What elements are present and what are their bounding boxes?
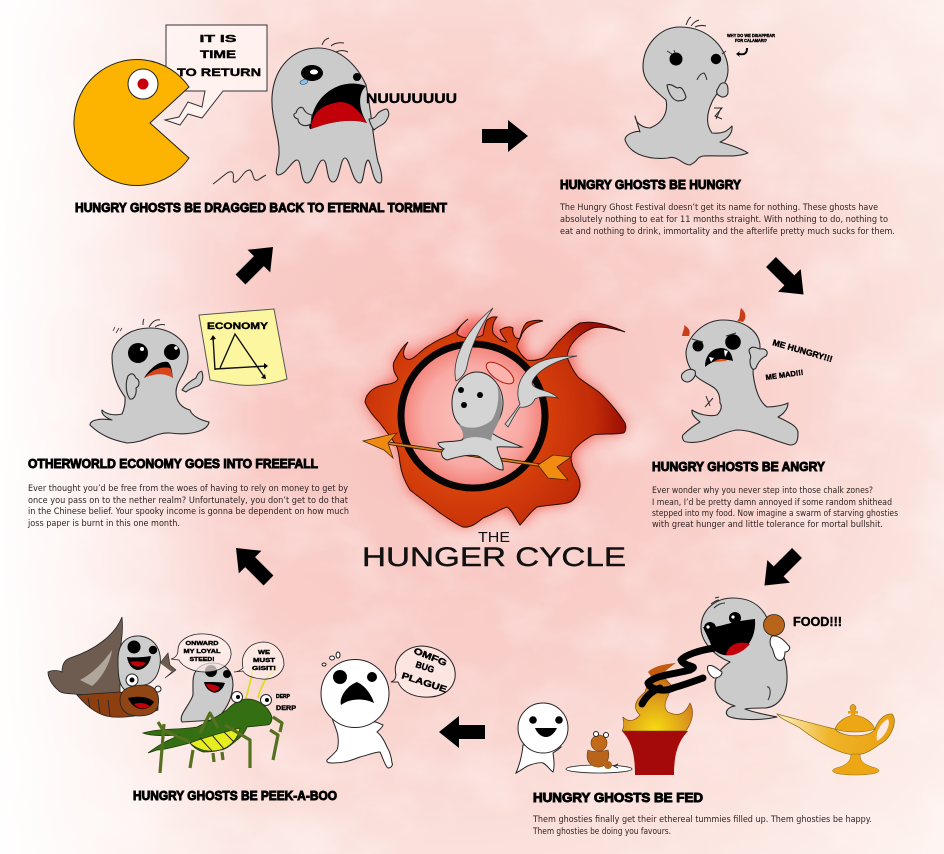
arrow head (363, 433, 397, 458)
speech bubble: it is time to return (165, 25, 267, 125)
text block: Them ghosties finally get their ethereal tummies filled up. Them ghosties be happy. (532, 815, 872, 825)
panel: hungry ghosts be angry (652, 308, 898, 530)
feasting ghost (701, 597, 790, 720)
icon: giant grasshopper (143, 666, 282, 773)
text block (652, 486, 898, 530)
halo (483, 358, 517, 388)
text block: once you pass on to the nether realm? Unfortunately, you don’t get to do that (28, 496, 349, 506)
text block: Ever wonder why you never step into those chalk zones? (652, 486, 873, 496)
arrow: to economy (225, 537, 280, 592)
derp text: DERP (276, 705, 297, 712)
ring (401, 344, 545, 488)
panel: dragged back to torment (74, 25, 457, 215)
arrow: to hungry (482, 120, 528, 152)
arrow: back to dragged (229, 236, 284, 291)
text block (27, 484, 349, 529)
icon: brazier with flame (622, 663, 693, 775)
text block: joss paper is burnt in this one month. (27, 519, 180, 529)
ghost screaming (272, 38, 389, 183)
text block: stepped into my food. Now imagine a swarm of starving ghosties (652, 509, 898, 519)
text block (559, 203, 895, 237)
text block: Ever thought you’d be free from the woes of having to rely on money to get by (28, 484, 348, 494)
icon: yellow pac-man (74, 60, 189, 186)
speech bubble: onward my loyal steed: MY LOYAL (184, 649, 221, 655)
ghost's thought text (727, 33, 776, 57)
angel wings (455, 308, 577, 427)
panel: otherworld economy goes into freefall (27, 309, 349, 529)
arrow: to fed (753, 542, 808, 597)
title: THE (478, 529, 510, 546)
text block: Them ghosties be doing you favours. (532, 827, 671, 837)
text block: in the Chinese belief. Your spooky income is gonna be dependent on how much (28, 507, 349, 517)
angry text: ME MAD!!! (765, 368, 804, 382)
speech bubble: it is time to return: TIME (200, 49, 236, 61)
sticky note: economy chart: ECONOMY (207, 321, 269, 332)
speech bubble: omfg bug plague (391, 646, 455, 697)
heading: HUNGRY GHOSTS BE PEEK-A-BOO (133, 789, 337, 803)
heading: HUNGRY GHOSTS BE FED (533, 791, 703, 805)
bow-and-arrow shaft (387, 443, 553, 467)
text block: eat and nothing to drink, immortality and the afterlife pretty much sucks for them. (560, 227, 895, 237)
shaft core (387, 443, 553, 467)
flame shape (365, 317, 626, 527)
speech bubble: onward my loyal steed (171, 634, 231, 672)
speech bubble: onward my loyal steed: STEED! (190, 657, 215, 663)
derp text (276, 694, 297, 712)
icon: roast chicken on plate (566, 732, 632, 773)
heading: HUNGRY GHOSTS BE DRAGGED BACK TO ETERNAL TORMENT (75, 201, 447, 215)
speech bubble: it is time to return: IT IS (200, 34, 237, 45)
angry text: ME HUNGRY!!! (771, 337, 834, 364)
heading: HUNGRY GHOSTS BE ANGRY (652, 460, 826, 474)
heading: HUNGRY GHOSTS BE HUNGRY (560, 178, 742, 192)
angry text (765, 337, 834, 382)
ghost's thought text: FOR CALAMARI? (735, 38, 767, 43)
squiggle trail (213, 170, 266, 184)
icon: golden lamp (777, 704, 894, 775)
sticky note: economy chart (199, 309, 287, 385)
hungry ghost (625, 17, 748, 165)
speech bubble: we must gisit: MUST (253, 658, 276, 664)
title (362, 529, 626, 572)
speech bubble: onward my loyal steed: ONWARD (186, 641, 218, 647)
derp text: DERP (276, 694, 290, 700)
central emblem (363, 308, 626, 527)
speech bubble: omfg bug plague: PLAGUE (400, 670, 448, 694)
pirate ghost with hat on worm steed (48, 617, 176, 717)
ghost's thought text: WHY DO WE DISAPPEAR (727, 33, 776, 38)
speech bubble: we must gisit: GISIT! (252, 666, 276, 672)
title: HUNGER CYCLE (362, 542, 626, 572)
speech bubble: omfg bug plague: OMFG (412, 646, 448, 668)
glow (365, 317, 625, 527)
scream text: NUUUUUUU (366, 90, 457, 106)
arrow fletching (538, 455, 571, 480)
smoke (642, 648, 715, 704)
arrow: to angry (760, 251, 815, 306)
heading: OTHERWORLD ECONOMY GOES INTO FREEFALL (28, 457, 318, 471)
text block: with great hunger and little tolerance for mortal bullshit. (652, 520, 883, 530)
text block: absolutely nothing to eat for 11 months straight. With nothing to do, nothing to (560, 215, 888, 225)
scared white ghost (321, 652, 392, 768)
speech bubble: we must gisit: WE (258, 650, 270, 656)
speech bubble: we must gisit (234, 642, 284, 679)
panel: hungry ghosts be peek-a-boo (48, 617, 455, 803)
speech bubble: omfg bug plague: BUG (414, 659, 436, 675)
text block: I mean, I’d be pretty damn annoyed if some random shithead (652, 498, 892, 508)
text block (532, 815, 872, 837)
arrow: to peek-a-boo (439, 716, 485, 748)
panicking ghost (90, 319, 209, 443)
ghost rider (181, 663, 233, 722)
text block: The Hungry Ghost Festival doesn’t get its name for nothing. These ghosts have (559, 203, 878, 213)
panel: hungry ghosts be fed (516, 597, 894, 837)
food text: FOOD!!! (793, 614, 842, 629)
speech bubble: it is time to return: TO RETURN (177, 67, 261, 79)
panel: hungry ghosts be hungry (559, 17, 895, 237)
central ghost (438, 372, 522, 470)
angry ghost (681, 308, 798, 445)
happy white ghost (516, 703, 568, 773)
